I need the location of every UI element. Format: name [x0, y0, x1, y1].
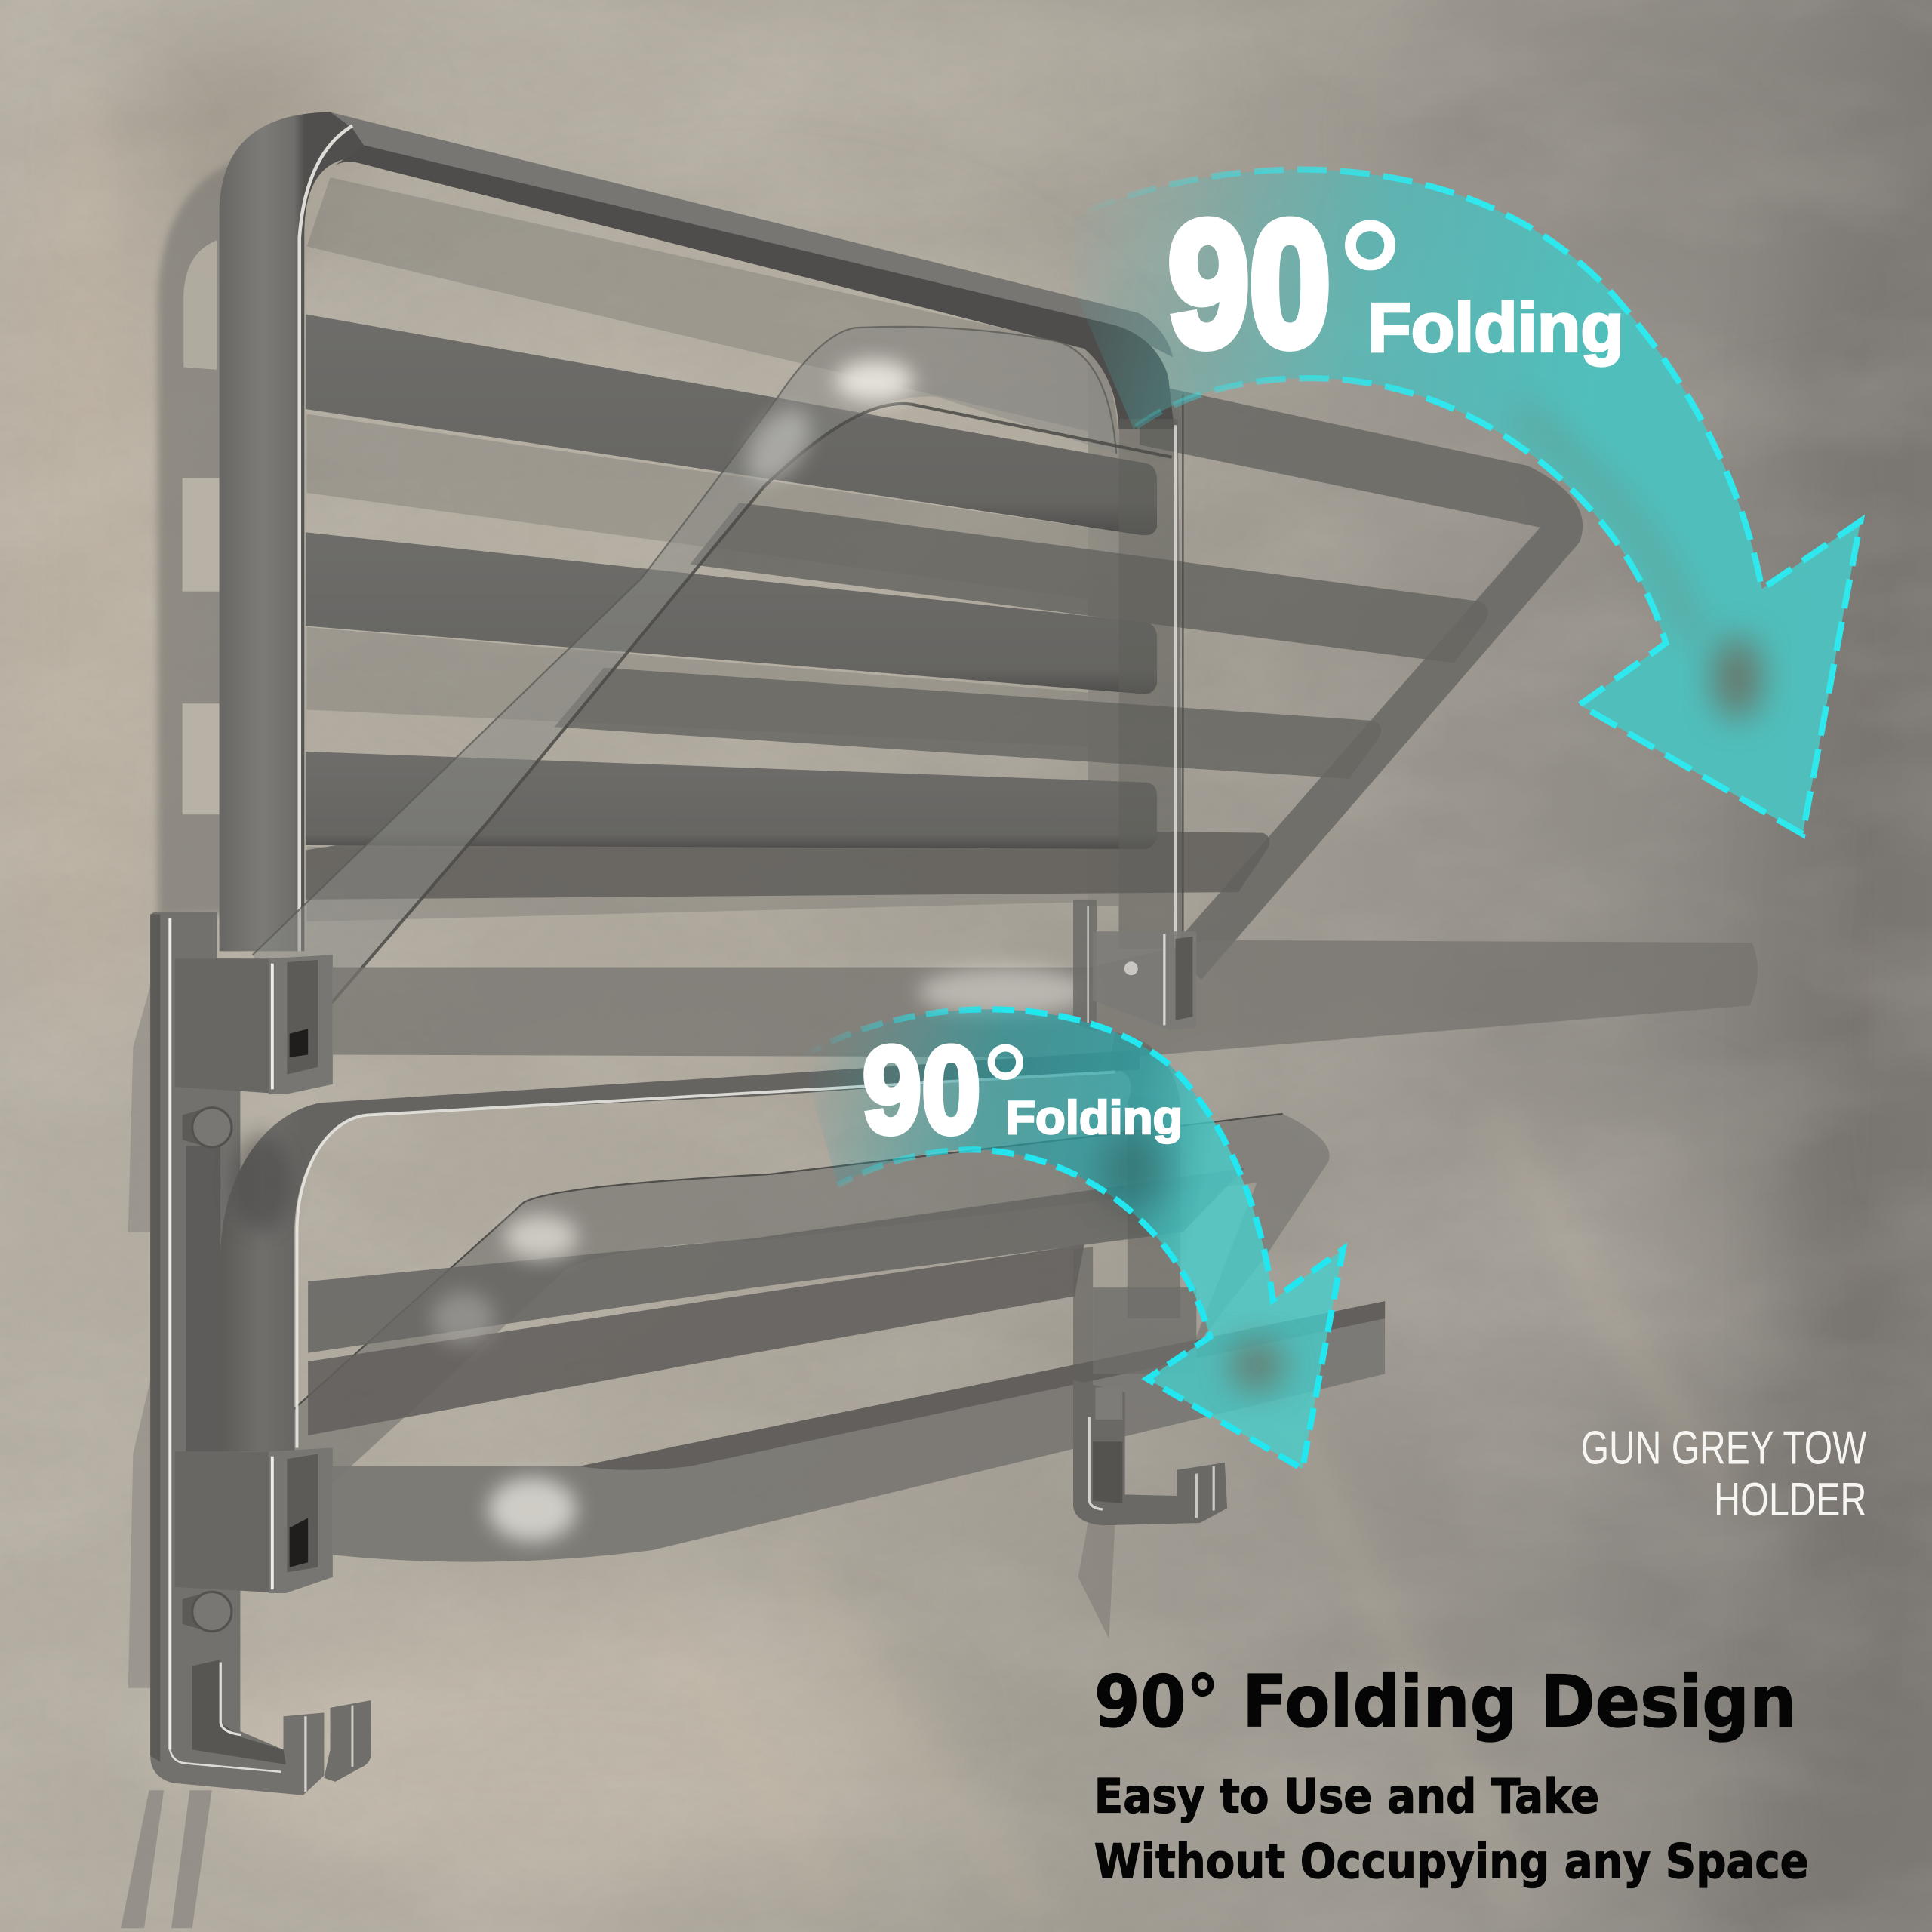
horizontal slat 1: [690, 503, 1488, 663]
post highlight: [300, 126, 352, 951]
glass highlight: [835, 360, 914, 401]
arrow body: [1048, 170, 1860, 834]
large teal arrow: [1048, 170, 1860, 834]
90 numeral: 90: [1168, 184, 1331, 383]
arrow dashed outline: [1048, 170, 1860, 834]
plate shadow zone: [186, 1146, 220, 1451]
frame side rail: [1140, 382, 1583, 980]
right bracket cube: [1095, 1387, 1122, 1420]
folded-down upper rack frame: [306, 382, 1583, 980]
headline block: [1094, 1660, 1809, 1889]
fold highlight: [504, 1215, 578, 1260]
rear column shadow: [158, 158, 247, 918]
upright upper rack frame: [220, 112, 1183, 955]
plate cast shadows: [128, 986, 150, 1688]
rear column window 2: [183, 478, 220, 592]
top rail band: [331, 112, 1173, 357]
glass band and frame: [255, 1114, 1330, 1503]
Folding word: Folding: [1367, 289, 1624, 366]
mount plate: [150, 912, 324, 1795]
small teal arrow: [801, 1009, 1343, 1469]
upper fold-motion glass sweep: [253, 327, 1172, 1038]
small arrow body: [801, 1009, 1343, 1469]
upper right post: [1073, 900, 1097, 1032]
upright slat 1: [306, 314, 1157, 535]
upper left bracket: [175, 955, 333, 1094]
lower frame right corner: [1109, 1032, 1180, 1318]
right lower post: [1073, 1247, 1093, 1441]
rear column window 3: [183, 703, 220, 814]
lower towel bar: [333, 1301, 1385, 1562]
upright upper rack slats: [306, 314, 1157, 849]
lower strips: [121, 1790, 212, 1928]
lower left bracket: [175, 1447, 333, 1593]
small arrow dark core: [1229, 1340, 1284, 1390]
small degree sign: [991, 1048, 1020, 1076]
lower frame curved post: [220, 1050, 1140, 1451]
lower rack folded frame: [255, 1114, 1330, 1503]
right brackets and hook: [1073, 900, 1227, 1525]
upper right block: [1093, 931, 1196, 1030]
upper towel bar: [333, 940, 1758, 1057]
horizontal slat 3: [306, 823, 1269, 900]
right lower block: [1093, 1287, 1196, 1374]
left post: [220, 112, 365, 951]
rear column window 1: [183, 240, 217, 370]
small arrow dashed outline: [801, 1009, 1343, 1469]
product name label: [1581, 1423, 1867, 1526]
lower rack slat 2: [308, 1244, 1084, 1435]
lower screw: [183, 1591, 232, 1632]
right hook shadow: [1078, 1523, 1115, 1638]
plate highlight: [169, 918, 171, 1749]
lower rack slat 1: [308, 1168, 1244, 1353]
wall shadow of folded rack: [121, 158, 1115, 1928]
rail shadow on wall: [307, 177, 1088, 921]
small arrow label: [863, 1020, 1183, 1158]
horizontal slat 2: [555, 668, 1381, 779]
upright slat 3: [306, 752, 1157, 849]
upper screw: [183, 1106, 232, 1149]
arrow dark core shadow: [1712, 635, 1762, 719]
large arrow label: [1168, 184, 1624, 383]
subhead line 1: Easy to Use and Take: [1094, 1769, 1599, 1824]
small 90 numeral: 90: [863, 1020, 981, 1158]
lower rack upright frame: [220, 1032, 1180, 1451]
top rail dark inner band: [335, 146, 1174, 429]
right translucent post: [1118, 419, 1183, 949]
label line 2: HOLDER: [1714, 1474, 1866, 1526]
rear hook of left double hook: [324, 1700, 371, 1782]
towel bar highlight: [488, 1478, 577, 1541]
degree sign: [1350, 226, 1390, 265]
hook slot: [192, 1660, 286, 1764]
right lower hook: [1073, 1380, 1227, 1525]
lower frame highlight: [297, 1072, 1115, 1447]
right post highlight: [1174, 425, 1177, 949]
headline: 90° Folding Design: [1094, 1660, 1796, 1743]
small Folding word: Folding: [1005, 1092, 1183, 1144]
right rear column: [1088, 345, 1118, 906]
upright slat 2: [306, 532, 1157, 694]
subhead line 2: Without Occupying any Space: [1094, 1834, 1809, 1889]
